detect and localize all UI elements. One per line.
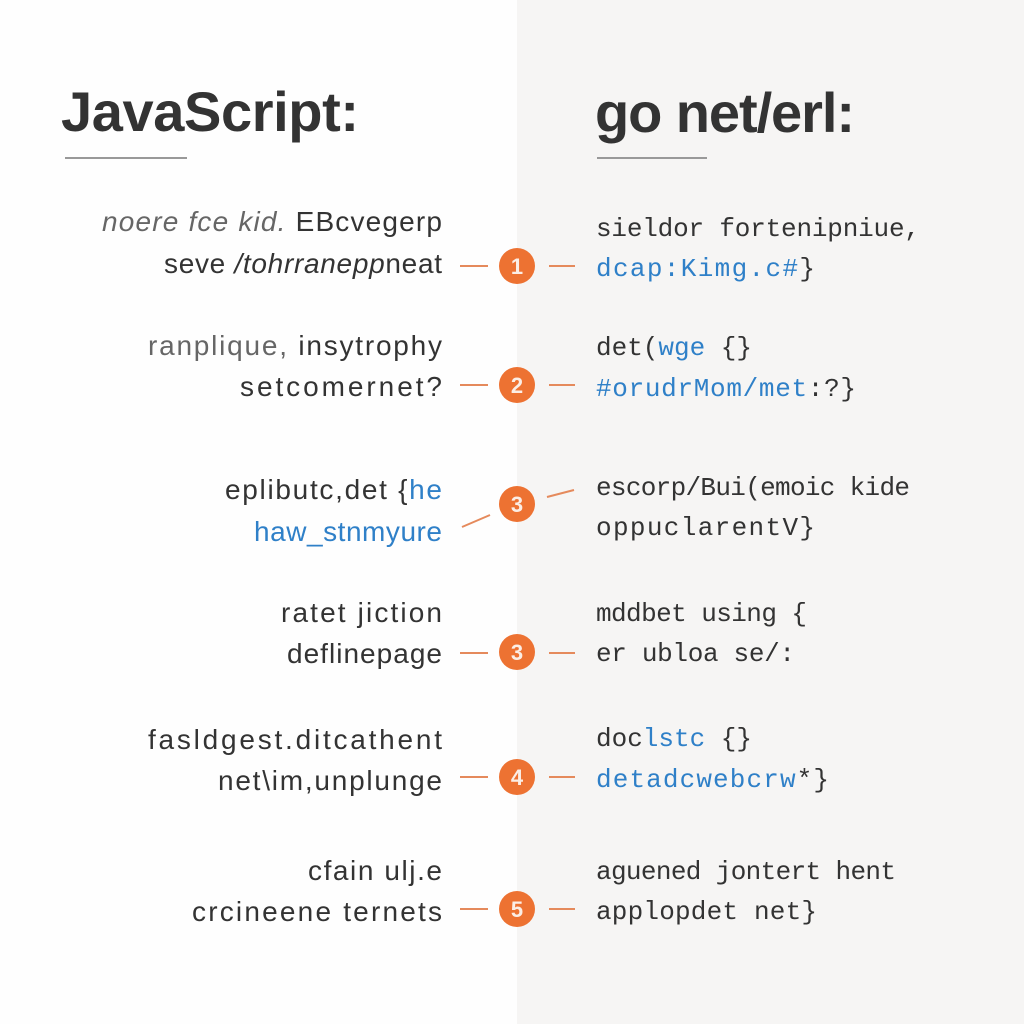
connector and badge 5 bbox=[460, 759, 575, 795]
connector and badge 1 bbox=[460, 248, 575, 284]
row 3 bbox=[225, 473, 910, 547]
left text 3: haw_stnmyure bbox=[254, 516, 442, 547]
right text 1 bbox=[596, 214, 920, 284]
connector and badge 6 bbox=[460, 891, 575, 927]
left text 2: ranplique, insytrophy bbox=[148, 330, 442, 361]
connector and badge 3 bbox=[462, 486, 574, 527]
connector and badge 4 bbox=[460, 634, 575, 670]
right text 4: er ubloa se/: bbox=[596, 639, 795, 669]
right text 5 bbox=[596, 724, 829, 795]
right text 6 bbox=[596, 857, 896, 927]
right text 5: detadcwebcrw*} bbox=[596, 765, 829, 795]
left text 5 bbox=[148, 724, 442, 796]
row 5 bbox=[148, 724, 829, 796]
connector and badge 2 bbox=[460, 367, 575, 403]
right text 1: sieldor fortenipniue, bbox=[596, 214, 920, 244]
left text 3 bbox=[225, 474, 442, 547]
right text 3: oppuclarentV} bbox=[596, 513, 815, 543]
left text 6: crcineene ternets bbox=[192, 896, 442, 927]
right text 1: dcap:Kimg.c#} bbox=[596, 254, 815, 284]
connector and badge 3: 3 bbox=[511, 492, 523, 517]
connector and badge 6: 5 bbox=[511, 897, 523, 922]
left text 4: deflinepage bbox=[287, 638, 442, 669]
left text 1: seve /tohrraneppneat bbox=[164, 248, 442, 279]
left text 2 bbox=[148, 330, 442, 402]
title: JavaScript: JavaScript: bbox=[61, 80, 359, 143]
left text 3: eplibutc,det {he bbox=[225, 474, 442, 505]
right text 2: #orudrMom/met:?} bbox=[596, 374, 856, 404]
connector and badge 1: 1 bbox=[511, 254, 523, 279]
title: go net/erl: go net/erl: bbox=[595, 81, 855, 144]
right text 2 bbox=[596, 333, 856, 404]
row 1 bbox=[102, 206, 920, 284]
left text 5: fasldgest.ditcathent bbox=[148, 724, 442, 755]
left text 6 bbox=[192, 855, 442, 927]
right text 6: aguened jontert hent bbox=[596, 857, 896, 887]
left text 2: setcomernet? bbox=[240, 371, 442, 402]
right text 6: applopdet net} bbox=[596, 897, 817, 927]
connector and badge 4: 3 bbox=[511, 640, 523, 665]
left text 4 bbox=[281, 597, 442, 669]
left text 5: net\im,unplunge bbox=[218, 765, 442, 796]
right text 5: doclstc {} bbox=[596, 724, 752, 754]
left text 1 bbox=[102, 206, 442, 279]
right text 3: escorp/Bui(emoic kide bbox=[596, 473, 910, 503]
right text 4 bbox=[596, 599, 807, 669]
left text 4: ratet jiction bbox=[281, 597, 442, 628]
right text 4: mddbet using { bbox=[596, 599, 807, 629]
row 2 bbox=[148, 330, 856, 404]
connector and badge 2: 2 bbox=[511, 373, 523, 398]
left text 1: noere fce kid. EBcvegerp bbox=[102, 206, 442, 237]
connector and badge 5: 4 bbox=[511, 765, 524, 790]
right text 2: det(wge {} bbox=[596, 333, 752, 363]
panel: right column background bbox=[517, 0, 1024, 1024]
row 4 bbox=[281, 597, 807, 670]
right text 3 bbox=[596, 473, 910, 543]
row 6 bbox=[192, 855, 896, 927]
left text 6: cfain ulj.e bbox=[308, 855, 442, 886]
